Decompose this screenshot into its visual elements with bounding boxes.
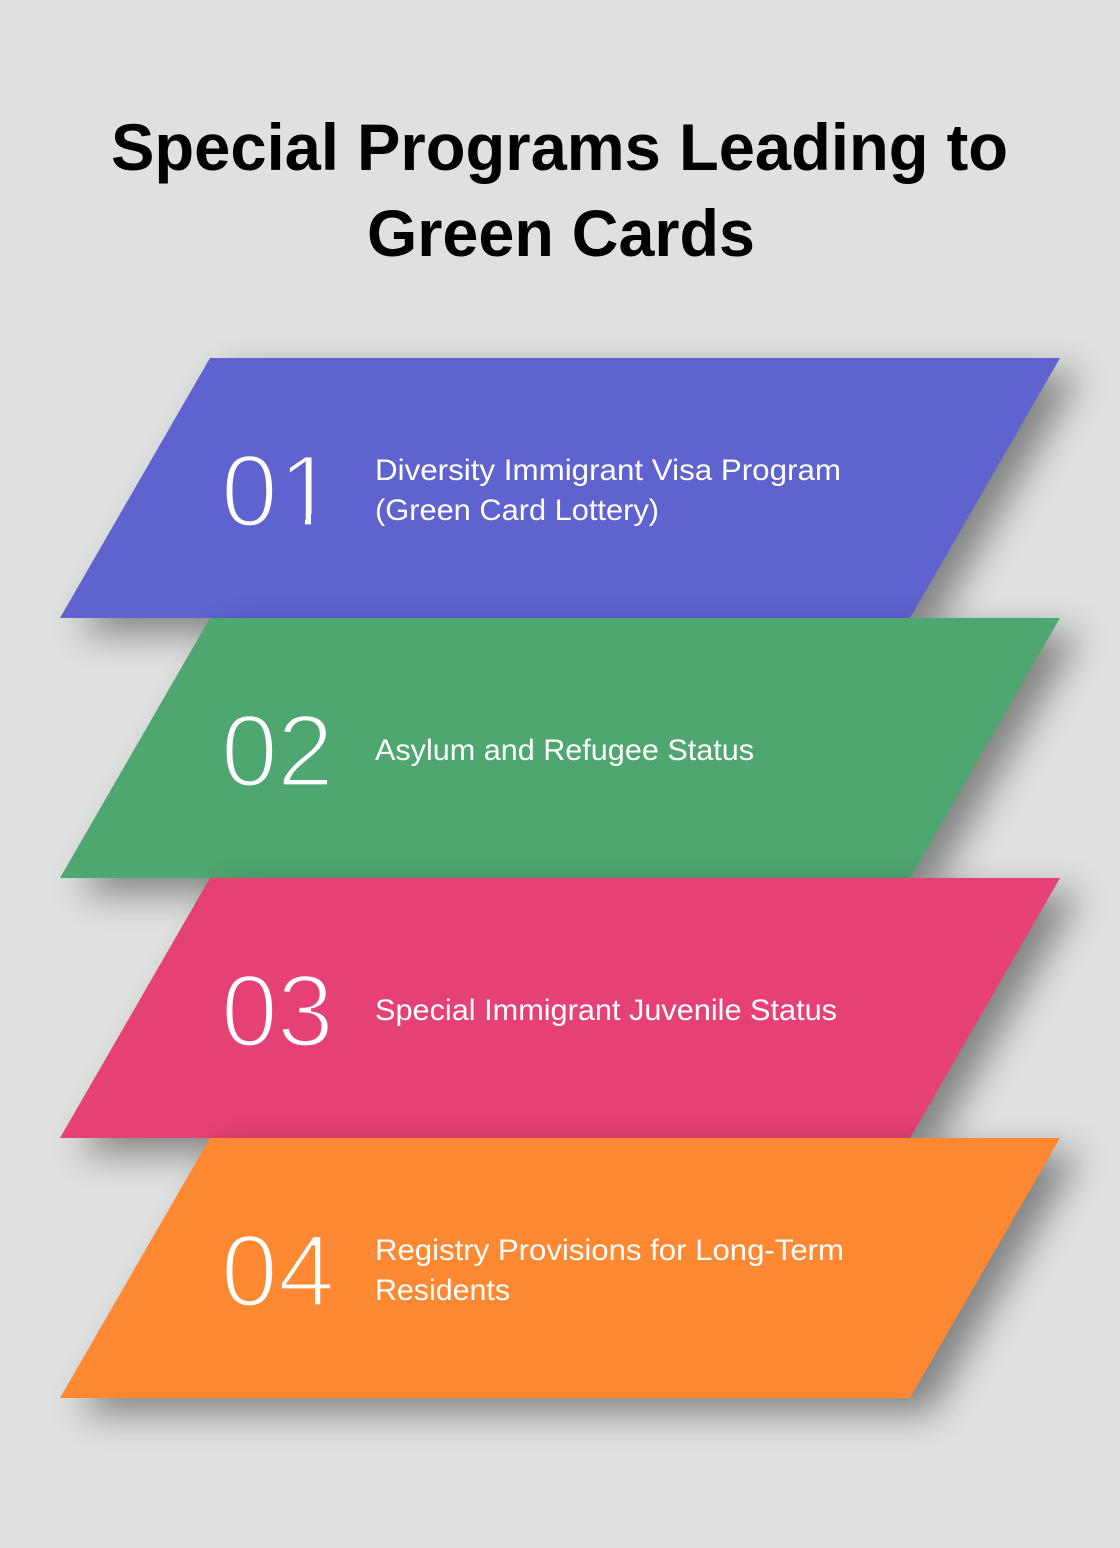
number 03: 03 [221, 954, 334, 1068]
title [111, 110, 1008, 270]
label 01 [375, 454, 841, 527]
number 01: 1 [278, 434, 335, 548]
label 04 [375, 1234, 844, 1307]
label 04: Registry Provisions for Long-Term [375, 1234, 844, 1267]
panel: step 03 [60, 878, 1080, 1153]
number 01 [226, 456, 312, 526]
label 02: Asylum and Refugee Status [375, 734, 754, 767]
panel: step 01 [60, 358, 1080, 633]
number 04: 04 [221, 1214, 335, 1328]
panel: step 02 [60, 618, 1080, 893]
panel: step 04 [60, 1138, 1080, 1413]
number 02: 02 [221, 694, 334, 808]
label 01: Diversity Immigrant Visa Program [375, 454, 841, 487]
label 03: Special Immigrant Juvenile Status [375, 994, 837, 1027]
title: Special Programs Leading to [111, 110, 1008, 184]
number 01: 0 [221, 434, 278, 548]
title: Green Cards [367, 196, 755, 270]
label 01: (Green Card Lottery) [375, 494, 659, 527]
label 04: Residents [375, 1274, 510, 1307]
